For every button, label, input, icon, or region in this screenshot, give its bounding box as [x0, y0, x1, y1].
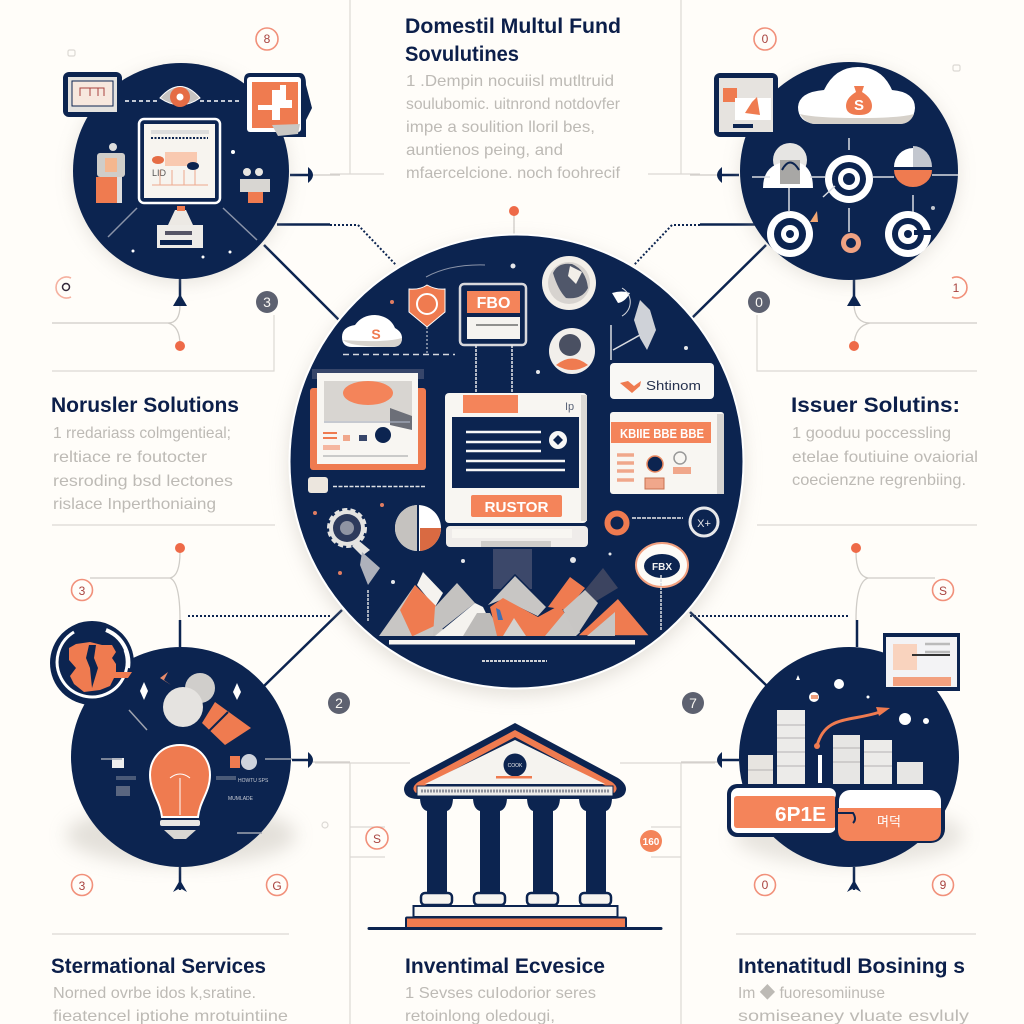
chart: central screen: LID — [152, 168, 167, 178]
text: Norusler Solutions — [51, 394, 239, 513]
pill: right orange label — [835, 786, 945, 843]
panel: right data card — [610, 412, 724, 494]
small card and dashes — [308, 477, 425, 493]
icon: small target — [841, 233, 861, 253]
numbered markers: 8 — [264, 32, 271, 46]
text: Norusler Solutions: resroding bsd lectones — [53, 473, 233, 490]
numbered markers: 0 — [755, 294, 763, 310]
icon: central target — [825, 155, 873, 203]
text: Norusler Solutions: Norusler Solutions — [51, 394, 239, 417]
pill: left orange label: 6P1E — [775, 804, 826, 826]
icon: side labels: HOWTU SPS — [238, 778, 269, 784]
label: Shtinom: Shtinom — [646, 378, 701, 393]
numbered markers: 0 — [762, 32, 769, 46]
text: Issuer Solutions: etelae foutiuine ovaiorial — [792, 449, 978, 466]
numbered markers: 160 — [643, 837, 660, 848]
text: International Business — [738, 955, 969, 1024]
icon: printer base — [157, 206, 203, 248]
text: Institutional Services — [405, 955, 605, 1024]
monitor — [445, 393, 588, 589]
text: Domestic Mutual Fund Solutions — [405, 15, 621, 182]
icon: people — [240, 168, 270, 203]
text: Issuer Solutions: Issuer Solutins: — [791, 394, 960, 417]
numbered markers: 3 — [79, 879, 86, 893]
icon: globe — [542, 256, 596, 310]
icon: FBO sign: FBO — [477, 295, 510, 312]
numbered markers: 1 — [953, 281, 960, 295]
pill: right orange label: 며덕 — [877, 814, 901, 829]
icon: cloud with money bag: S — [854, 97, 864, 114]
icon: cloud: S — [371, 326, 381, 342]
numbered markers: 2 — [335, 695, 343, 711]
text: International Services — [51, 955, 288, 1024]
text: Norusler Solutions: rislace Inperthoniaing — [53, 496, 216, 513]
monitor: Ip — [565, 401, 574, 413]
panel: bottom left circle — [50, 621, 296, 867]
icon: side labels — [112, 754, 269, 802]
text: International Business: Im ◆ fuoresomiinuse — [738, 984, 885, 1002]
icon: right puzzle card — [244, 73, 312, 137]
text: Domestic Mutual Fund Solutions: auntienos peing, and — [406, 142, 563, 159]
icon: headset person — [763, 143, 813, 188]
numbered markers: 3 — [79, 584, 86, 598]
text: Domestic Mutual Fund Solutions: Domestil Multul Fund — [405, 15, 621, 38]
icon: small compass — [690, 508, 718, 536]
badge: FBX — [636, 543, 688, 587]
text: Issuer Solutions — [791, 394, 978, 489]
text: Issuer Solutions: 1 gooduu poccessling — [792, 425, 951, 442]
text: Institutional Services: Inventimal Ecvesice — [405, 955, 605, 978]
icon: bank building: COOK — [508, 763, 523, 769]
icon: orange ring — [608, 514, 683, 532]
icon: person badge — [549, 328, 595, 374]
numbered markers: G — [272, 879, 282, 893]
pill: left orange label — [727, 784, 840, 837]
icon: half pie — [395, 505, 441, 551]
icon: wrench figure — [611, 288, 656, 360]
panel: central circle — [288, 234, 744, 696]
panel: bottom right circle — [727, 633, 964, 867]
arrow: growth — [814, 707, 890, 749]
numbered markers: S — [939, 584, 947, 598]
icon: side labels: MUMLADE — [228, 796, 254, 802]
text: Domestic Mutual Fund Solutions: soulubomic. uitnrond notdovfer — [406, 96, 621, 113]
text: International Business: Intenatitudl Bosining s — [738, 955, 965, 978]
icon: right target — [885, 211, 932, 257]
icon: left target — [767, 211, 813, 257]
icon: left chart card — [63, 72, 122, 117]
chart: central screen — [139, 119, 220, 203]
text: International Services: Norned ovrbe idos k,sratine. — [53, 985, 256, 1002]
numbered markers: 3 — [263, 294, 271, 310]
connector lines — [52, 167, 977, 892]
icon: document card — [714, 73, 778, 137]
icon: brain medallion — [50, 621, 134, 705]
chart: report card — [883, 633, 960, 691]
numbered markers: 0 — [762, 878, 769, 892]
mountains — [368, 568, 661, 661]
icon: eye — [125, 86, 240, 107]
text: Domestic Mutual Fund Solutions: 1 .Dempin nocuiisl mutltruid — [406, 73, 614, 90]
panel: right data card: KBIIE BBE BBE — [620, 426, 704, 441]
badge: FBX: FBX — [652, 562, 672, 573]
text: Norusler Solutions: reltiace re foutocter — [53, 449, 208, 466]
icon: capsule — [163, 673, 251, 745]
text: Domestic Mutual Fund Solutions: mfaercelcione. noch foohrecif — [406, 165, 621, 182]
numbered markers: 7 — [689, 695, 697, 711]
icon: pie chart — [894, 146, 932, 187]
panel: left browser card — [310, 369, 426, 470]
text: Issuer Solutions: coecienzne regrenbiing. — [792, 472, 966, 489]
icon: light bulb — [150, 745, 210, 839]
icon: cloud — [342, 315, 455, 354]
text: Norusler Solutions: 1 rredariass colmgentieal; — [53, 425, 231, 442]
icon: cloud with money bag — [798, 67, 915, 124]
text: Domestic Mutual Fund Solutions: impe a soulition lloril bes, — [406, 119, 595, 136]
chart: bars — [748, 710, 923, 784]
icon: person — [96, 143, 125, 203]
icon: gear — [329, 510, 380, 585]
icon: shield — [409, 285, 445, 355]
text: Domestic Mutual Fund Solutions: Sovulutines — [405, 43, 519, 66]
numbered markers — [56, 28, 967, 896]
panel: top right circle — [714, 62, 958, 284]
monitor: RUSTOR — [484, 499, 549, 516]
text: Institutional Services: 1 Sevses cuIodorior seres — [405, 985, 596, 1002]
icon: small compass: X+ — [697, 518, 711, 530]
icon: FBO sign — [460, 284, 526, 393]
numbered markers: 9 — [940, 878, 947, 892]
icon: bank building — [369, 723, 661, 928]
numbered markers: S — [373, 832, 381, 846]
panel: top left circle — [63, 63, 312, 283]
text: International Services: Stermational Services — [51, 955, 266, 978]
label: Shtinom — [610, 363, 714, 399]
